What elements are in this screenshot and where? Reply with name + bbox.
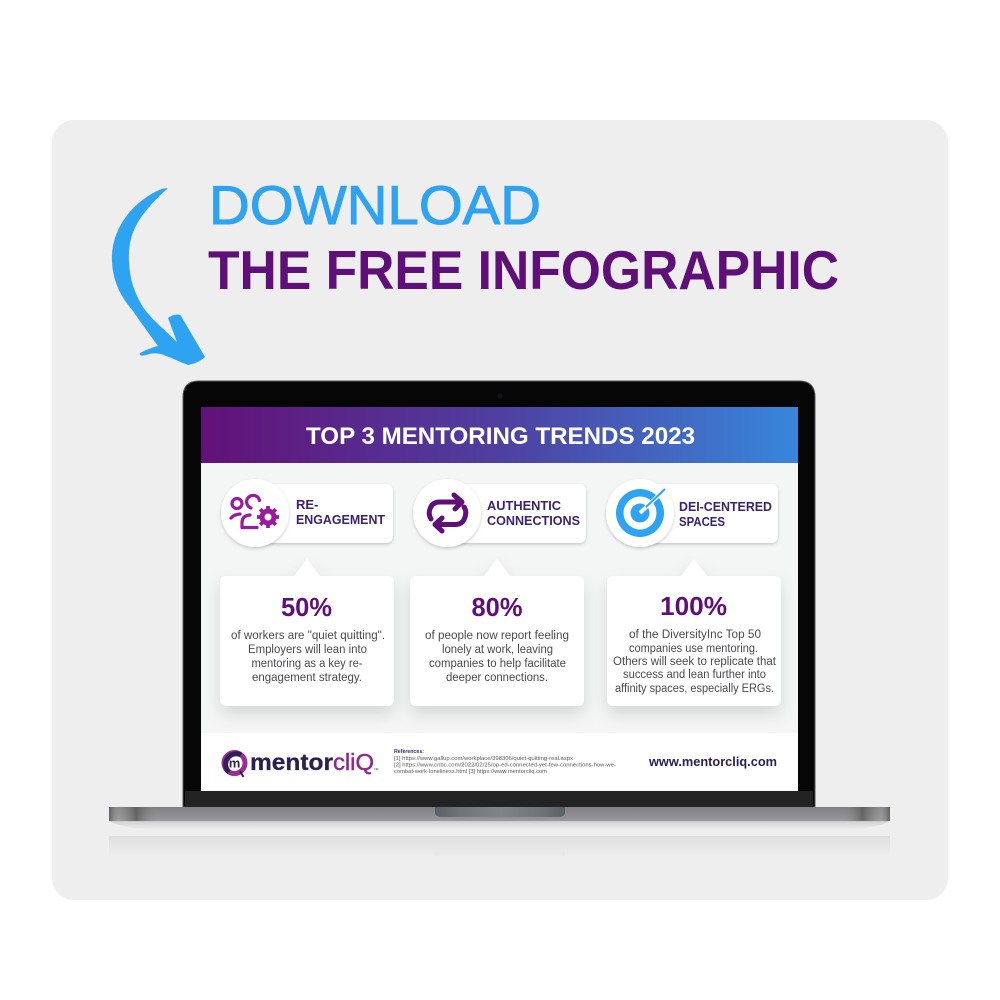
laptop [109, 381, 890, 856]
description: affinity spaces, especially ERGs. [615, 683, 774, 695]
arrow: curved blue arrow [112, 188, 205, 365]
logo: TM [374, 767, 379, 771]
website: www.mentorcliq.com [648, 754, 777, 769]
description: companies to help facilitate [429, 658, 566, 670]
description: mentoring as a key re- [252, 658, 363, 670]
icon: repeat arrows [429, 495, 466, 531]
description: Others will seek to replicate that [613, 656, 777, 668]
background panel [52, 120, 948, 900]
card 2 [410, 559, 584, 706]
headline: THE FREE INFOGRAPHIC [208, 239, 839, 301]
description: of workers are "quiet quitting". [231, 630, 385, 642]
description: engagement strategy. [252, 672, 362, 684]
column 1 heading [221, 479, 393, 547]
stat: 50% [281, 592, 332, 622]
description: of the DiversityInc Top 50 [629, 629, 761, 641]
description [425, 630, 569, 684]
headline [208, 174, 839, 301]
card 3 [607, 559, 781, 706]
references: References: [394, 749, 424, 755]
footer [201, 733, 798, 790]
stat: 80% [472, 592, 522, 622]
label: ENGAGEMENT [296, 512, 385, 527]
label: SPACES [679, 514, 725, 529]
laptop reflection [109, 836, 890, 856]
logo mark [224, 752, 245, 777]
label: CONNECTIONS [487, 513, 580, 528]
references: [2] https://www.cnbc.com/2022/02/25/op-ed-connected-yet-few-connections-how-we- [394, 762, 616, 768]
logo: mentor [250, 749, 333, 775]
column 2 heading [413, 479, 586, 547]
description [231, 630, 385, 684]
screen [201, 407, 798, 791]
label: RE- [296, 497, 318, 512]
title: TOP 3 MENTORING TRENDS 2023 [306, 423, 695, 450]
description: Employers will lean into [248, 644, 367, 656]
card 1 [220, 559, 394, 706]
description [613, 629, 777, 695]
stat: 100% [660, 591, 727, 621]
icon: target [616, 489, 665, 537]
laptop lid [183, 381, 815, 807]
references: combat-work-loneliness.html [3] https://www.mentorcliq.com [394, 769, 548, 775]
icon: people with gear [231, 495, 279, 528]
logo mark: m [229, 756, 240, 770]
label: DEI-CENTERED [679, 499, 772, 514]
description: success and lean further into [623, 669, 766, 681]
description: deeper connections. [446, 672, 548, 684]
description: companies use mentoring. [629, 643, 758, 655]
laptop chin [185, 791, 813, 807]
description: of people now report feeling [425, 630, 569, 642]
references: [1] https://www.gallup.com/workplace/398306/quiet-quitting-real.aspx [394, 756, 573, 762]
laptop base [109, 807, 890, 829]
references [394, 749, 616, 775]
logo [224, 749, 379, 777]
label: AUTHENTIC [487, 498, 562, 513]
header band [201, 407, 798, 463]
description: lonely at work, leaving [442, 644, 553, 656]
logo: cliQ [333, 749, 374, 775]
headline: DOWNLOAD [209, 174, 541, 236]
column 3 heading [606, 479, 778, 547]
webcam [498, 394, 502, 398]
